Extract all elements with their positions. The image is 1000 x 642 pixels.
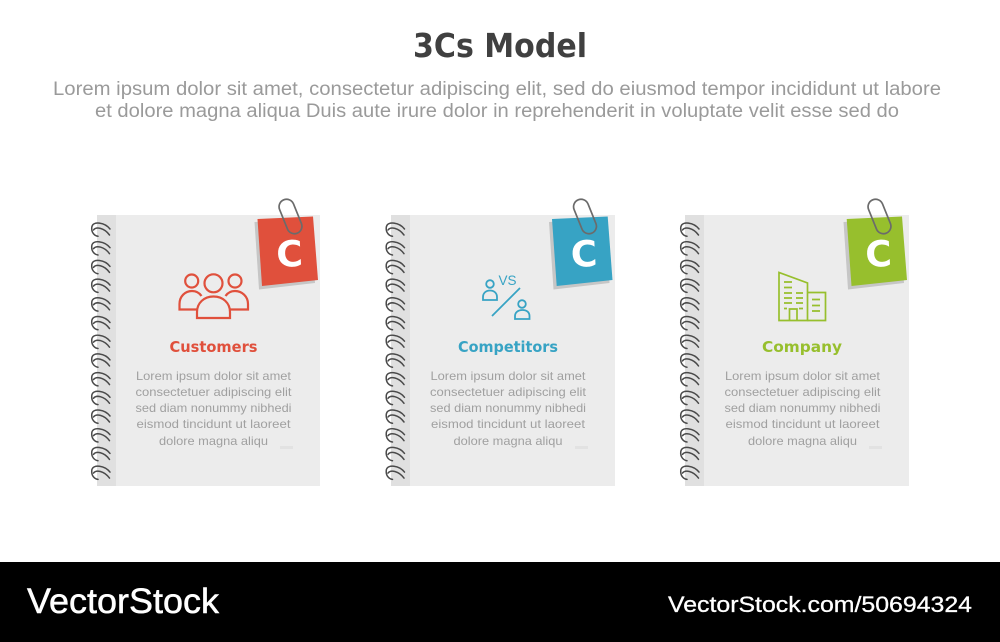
panel: customers: [92, 197, 320, 486]
note letter: C: [570, 234, 598, 276]
icon: paperclip: [571, 197, 599, 236]
body text: eismod tincidunt ut laoreet: [136, 417, 291, 431]
footer bar: [0, 562, 1000, 642]
spiral rings: [92, 223, 110, 479]
notebook page: [97, 215, 320, 486]
body text: sed diam nonummy nibhedi: [136, 401, 292, 415]
body text: dolore magna aliqu: [159, 434, 268, 448]
heading: customers: Customers: [170, 338, 258, 356]
notebook page: [685, 215, 909, 486]
body text: [136, 369, 292, 448]
body text: [430, 369, 587, 448]
blue sticky note: [552, 216, 612, 286]
heading: competitors: Competitors: [458, 338, 558, 356]
body text: dolore magna aliqu: [454, 434, 562, 448]
icon: paperclip: [866, 197, 893, 236]
body text: eismod tincidunt ut laoreet: [726, 417, 880, 431]
body text: Lorem ipsum dolor sit amet: [725, 369, 881, 383]
body text: [724, 369, 881, 448]
body text: consectetuer adipiscing elit: [430, 385, 587, 399]
icon: customers group: [180, 274, 248, 318]
notebook spine: [97, 215, 116, 486]
footer logo: VectorStock: [27, 582, 220, 621]
body text: consectetuer adipiscing elit: [724, 385, 881, 399]
heading: company: Company: [762, 338, 842, 356]
intro text: et dolore magna aliqua Duis aute irure dolor in reprehenderit in voluptate velit esse sed do: [95, 101, 899, 122]
note shadow: [549, 219, 610, 290]
panel: competitors: [386, 197, 615, 486]
intro text: [53, 79, 941, 122]
body text: dolore magna aliqu: [748, 434, 857, 448]
body text: sed diam nonummy nibhedi: [724, 401, 880, 415]
spiral rings: [386, 223, 404, 479]
panel: company: [681, 197, 909, 486]
body text: sed diam nonummy nibhedi: [430, 401, 586, 415]
green sticky note: [847, 216, 907, 286]
notebook page: [391, 215, 615, 486]
icon: paperclip: [277, 197, 304, 236]
note shadow: [254, 219, 315, 290]
body text: consectetuer adipiscing elit: [136, 385, 292, 399]
body text: eismod tincidunt ut laoreet: [431, 417, 586, 431]
body text: Lorem ipsum dolor sit amet: [136, 369, 292, 383]
note letter: C: [275, 234, 304, 276]
icon: competitors versus: [483, 273, 530, 319]
notebook spine: [391, 215, 410, 486]
note shadow: [844, 219, 904, 290]
red sticky note: [258, 216, 318, 286]
note letter: C: [864, 234, 893, 276]
intro text: Lorem ipsum dolor sit amet, consectetur adipiscing elit, sed do eiusmod tempor incididunt ut labore: [53, 79, 941, 100]
spiral rings: [681, 223, 699, 479]
icon: competitors versus: VS: [498, 273, 517, 288]
body text: Lorem ipsum dolor sit amet: [430, 369, 586, 383]
notebook spine: [685, 215, 704, 486]
title: 3Cs Model: [413, 26, 587, 65]
icon: company building: [779, 272, 826, 320]
footer image id: VectorStock.com/50694324: [668, 592, 972, 617]
